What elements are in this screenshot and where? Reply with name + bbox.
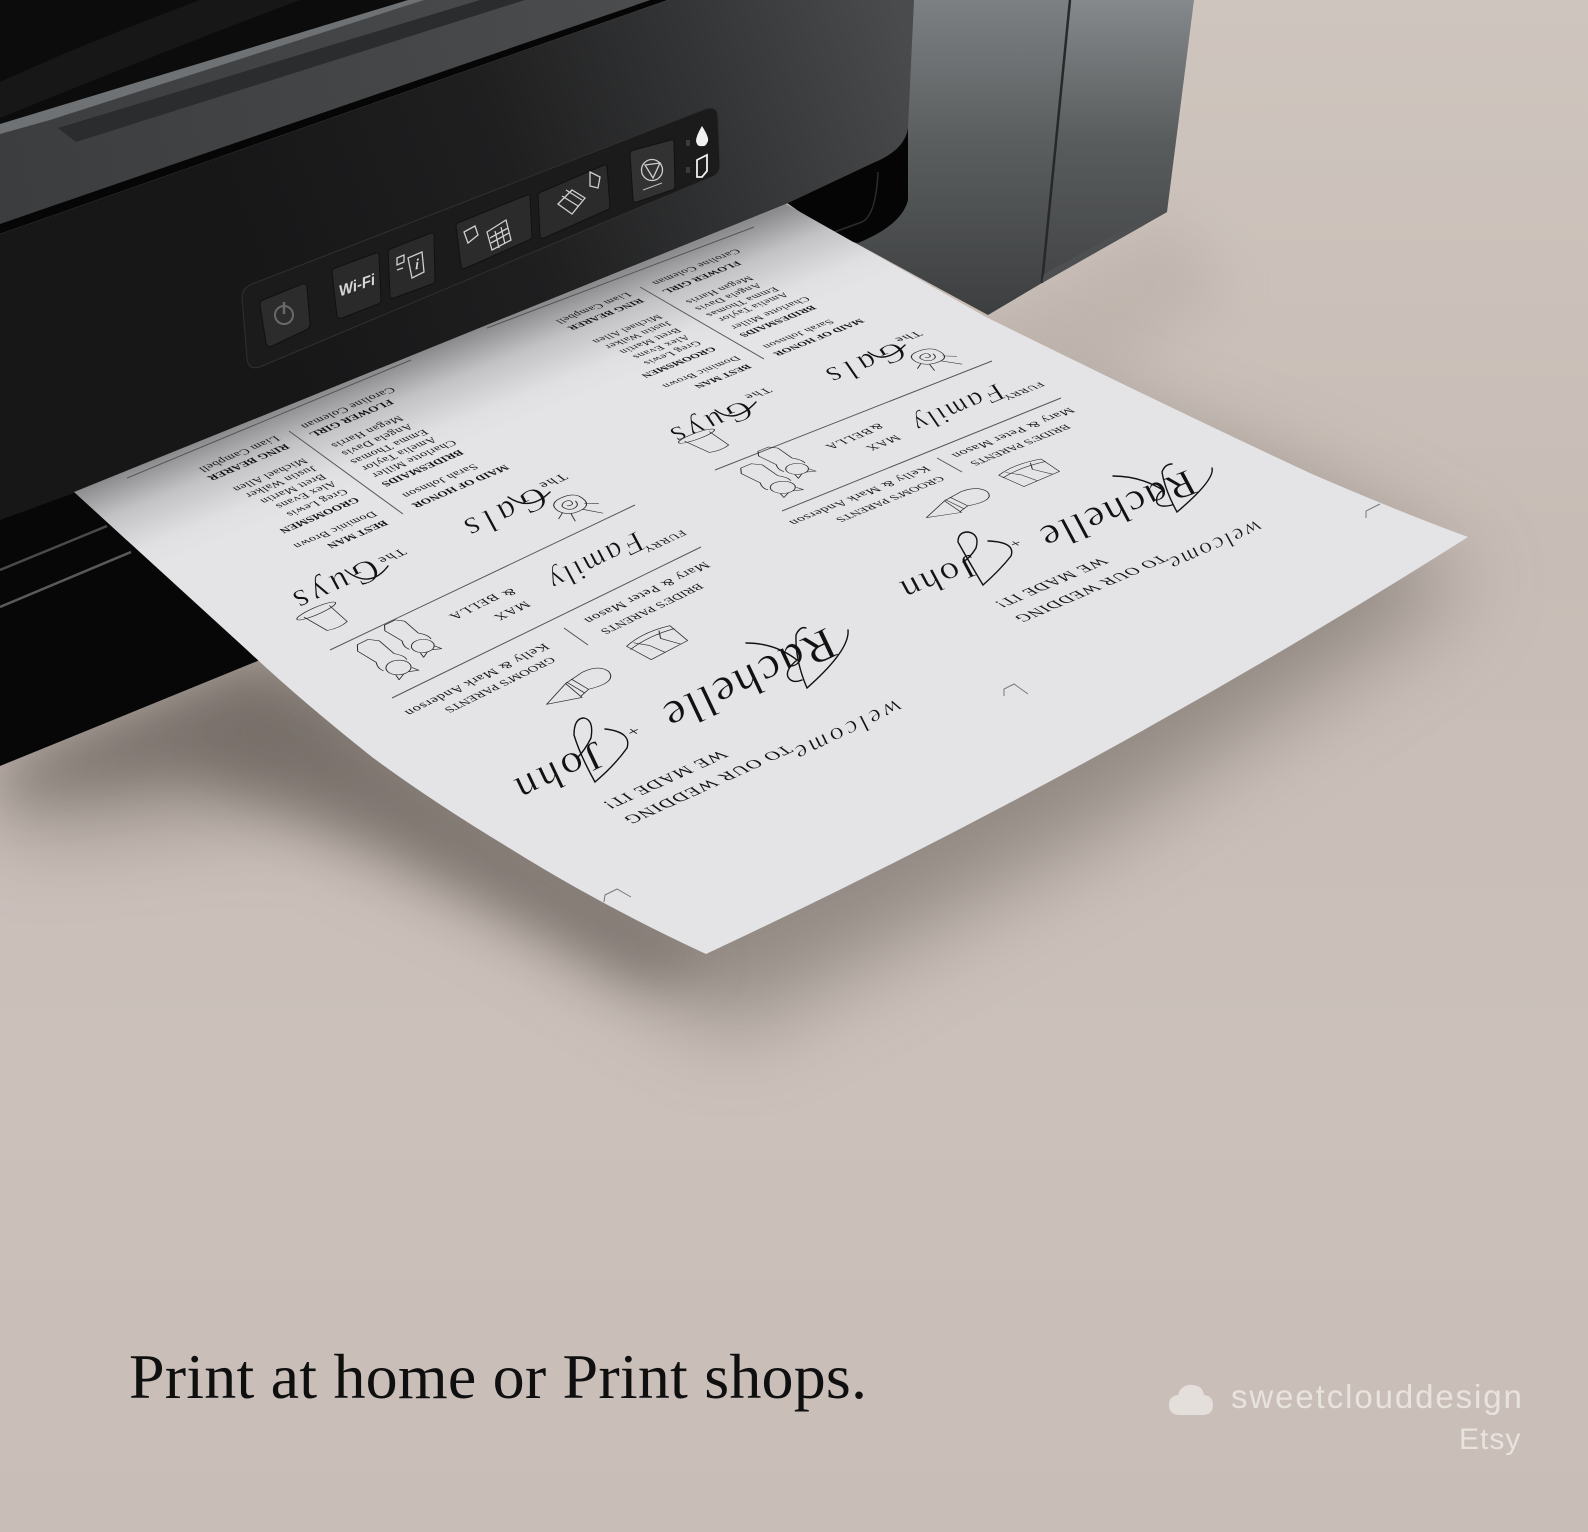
flower girl: FLOWER GIRL	[659, 259, 743, 295]
pet names: BELLA	[821, 427, 877, 451]
lid band	[0, 0, 650, 225]
stop button	[630, 140, 675, 202]
groomsmen: GROOMSMEN	[276, 495, 362, 535]
bridesmaids: Charlotte Miller	[368, 438, 460, 480]
groom's parents: GROOM'S PARENTS	[441, 655, 559, 715]
crop marks	[604, 504, 1380, 902]
icon: paper	[697, 155, 707, 177]
bridesmaids: Amelia Taylor	[715, 291, 791, 323]
groomsmen	[230, 456, 362, 535]
icon: ink drop	[696, 126, 708, 146]
power button	[260, 284, 310, 347]
icon: top hat	[675, 427, 738, 456]
the guys heading: Guys	[280, 552, 390, 620]
network info button	[388, 233, 435, 298]
ring bearer: RING BEARER	[564, 297, 646, 331]
groomsmen: GROOMSMEN	[637, 345, 718, 379]
bridesmaids: Megan Harris	[328, 414, 406, 450]
program card: right	[487, 227, 1269, 625]
icon: dress bust	[996, 457, 1063, 488]
bridesmaids: Angela Davis	[338, 422, 416, 458]
best man: BEST MAN	[690, 363, 753, 389]
furry family heading: Family	[539, 526, 654, 598]
shop name: Etsy	[1459, 1423, 1521, 1456]
bride's parents: BRIDE'S PARENTS	[966, 423, 1074, 467]
groomsmen: Justin Walker	[242, 464, 320, 500]
couple names: John	[890, 548, 990, 608]
bridesmaids: Megan Harris	[682, 274, 756, 306]
welcome title	[989, 515, 1269, 625]
icon: dress bust	[624, 624, 691, 661]
groomsmen: Michael Allen	[589, 313, 665, 345]
divider lines	[487, 227, 1061, 511]
icon: cloud	[1169, 1385, 1213, 1415]
lid recess	[58, 0, 525, 142]
brand name: sweetclouddesign	[1231, 1378, 1524, 1415]
bridesmaids: Angela Davis	[691, 282, 765, 312]
maid of honor: Sarah Johnson	[759, 318, 837, 350]
brand watermark	[1169, 1378, 1524, 1456]
lower black tray	[0, 490, 260, 766]
couple names: +	[1004, 537, 1026, 549]
icon: groom bust	[534, 664, 620, 710]
best man: Dominic Brown	[659, 354, 743, 390]
bridesmaids: Emma Thomas	[702, 285, 782, 319]
welcome title: WE MADE IT!	[598, 748, 732, 812]
groomsmen: Michael Allen	[230, 456, 310, 494]
welcome title: TO OUR WEDDING	[1009, 553, 1173, 625]
groomsmen: Brett Martin	[616, 327, 684, 355]
icon: cat in hand two	[351, 636, 421, 681]
bride's parents: Mary & Peter Mason	[948, 406, 1078, 460]
the gals heading: The	[890, 330, 926, 344]
pet names: MAX	[862, 433, 904, 453]
welcome title: TO OUR WEDDING	[618, 743, 798, 827]
furry family heading: FURRY	[999, 381, 1047, 401]
printer body	[0, 0, 1194, 766]
groom's parents: Kelly & Mark Anderson	[401, 642, 553, 718]
icon: rose	[542, 490, 608, 528]
the guys heading: The	[373, 546, 409, 566]
the gals heading: Gals	[812, 336, 916, 392]
groomsmen: Greg Lewis	[283, 487, 351, 519]
program card: left	[127, 360, 910, 827]
icon: cat in hand one	[379, 617, 444, 658]
bridesmaids: Emma Thomas	[347, 428, 431, 466]
groomsmen: Greg Lewis	[640, 339, 704, 367]
top glass cover	[0, 0, 420, 128]
bridesmaids: Amelia Taylor	[358, 435, 440, 473]
couple names: Rachelle	[1028, 462, 1209, 557]
wifi button	[332, 253, 381, 318]
welcome title: welcome	[1161, 515, 1269, 575]
bridesmaids: Charlotte Miller	[727, 295, 813, 331]
status lights	[686, 140, 690, 173]
pet names: BELLA	[445, 592, 503, 622]
icon: top hat	[294, 600, 358, 636]
front glossy panel	[0, 0, 914, 520]
best man: BEST MAN	[324, 518, 390, 550]
flower girl: Caroline Coleman	[649, 247, 743, 287]
welcome title: welcome	[786, 694, 910, 768]
pet names	[821, 422, 904, 453]
bridesmaids	[682, 274, 818, 338]
couple names: Rachelle	[651, 619, 850, 741]
pet names: &	[498, 586, 520, 600]
flower girl: FLOWER GIRL	[306, 398, 396, 438]
ring bearer: RING BEARER	[203, 442, 292, 482]
flower girl: Caroline Coleman	[298, 385, 398, 431]
pet names	[445, 586, 534, 623]
furry family heading: FURRY	[639, 528, 689, 554]
bride's parents: Mary & Peter Mason	[580, 560, 714, 626]
lid highlight	[0, 0, 424, 134]
couple names	[503, 619, 850, 811]
printer side panels	[850, 0, 1070, 315]
icon: rose	[900, 344, 967, 376]
the guys heading: The	[740, 386, 776, 402]
furry family heading: Family	[903, 378, 1014, 437]
groomsmen	[589, 313, 718, 379]
groomsmen: Justin Walker	[601, 320, 675, 350]
the gals heading: Gals	[451, 480, 557, 548]
paper exit slot	[787, 125, 908, 243]
ring bearer: Liam Campbell	[552, 291, 634, 325]
pet names: MAX	[490, 599, 534, 623]
pet names: &	[865, 422, 887, 432]
bridesmaids	[328, 414, 466, 488]
layout button two	[538, 165, 610, 238]
maid of honor: MAID OF HONOR	[769, 317, 866, 357]
icon: groom bust	[913, 486, 998, 523]
divider lines	[127, 360, 701, 698]
bride's parents: BRIDE'S PARENTS	[597, 582, 707, 636]
ring bearer: Liam Campbell	[195, 434, 283, 474]
groomsmen: Alex Evans	[272, 479, 340, 511]
bridesmaids: BRIDESMAIDS	[736, 304, 818, 338]
the guys heading: Guys	[657, 395, 763, 451]
groomsmen: Alex Evans	[629, 334, 693, 360]
control strip	[242, 108, 720, 368]
bridesmaids: BRIDESMAIDS	[378, 448, 466, 488]
printed paper sheet	[74, 204, 1468, 954]
lid edge	[0, 0, 668, 234]
couple names: John	[503, 733, 617, 811]
network info button: i	[415, 256, 420, 274]
wifi button: Wi-Fi	[339, 271, 375, 301]
the gals heading: The	[534, 471, 570, 491]
best man: Dominic Brown	[290, 509, 380, 551]
layout button one	[456, 195, 532, 269]
headline: Print at home or Print shops.	[129, 1341, 867, 1412]
groomsmen: Brett Martin	[257, 472, 329, 506]
icon: cat in hand two	[734, 461, 806, 498]
welcome title: WE MADE IT!	[989, 555, 1113, 611]
welcome title	[598, 694, 910, 827]
maid of honor: MAID OF HONOR	[408, 463, 511, 510]
maid of honor: Sarah Johnson	[399, 462, 481, 500]
groom's parents: GROOM'S PARENTS	[832, 475, 948, 523]
floor shadow under paper and printer	[0, 215, 1470, 1030]
groom's parents: Kelly & Mark Anderson	[785, 464, 935, 528]
icon: cat in hand one	[752, 445, 818, 479]
couple names: +	[620, 723, 646, 739]
couple names	[890, 462, 1212, 608]
